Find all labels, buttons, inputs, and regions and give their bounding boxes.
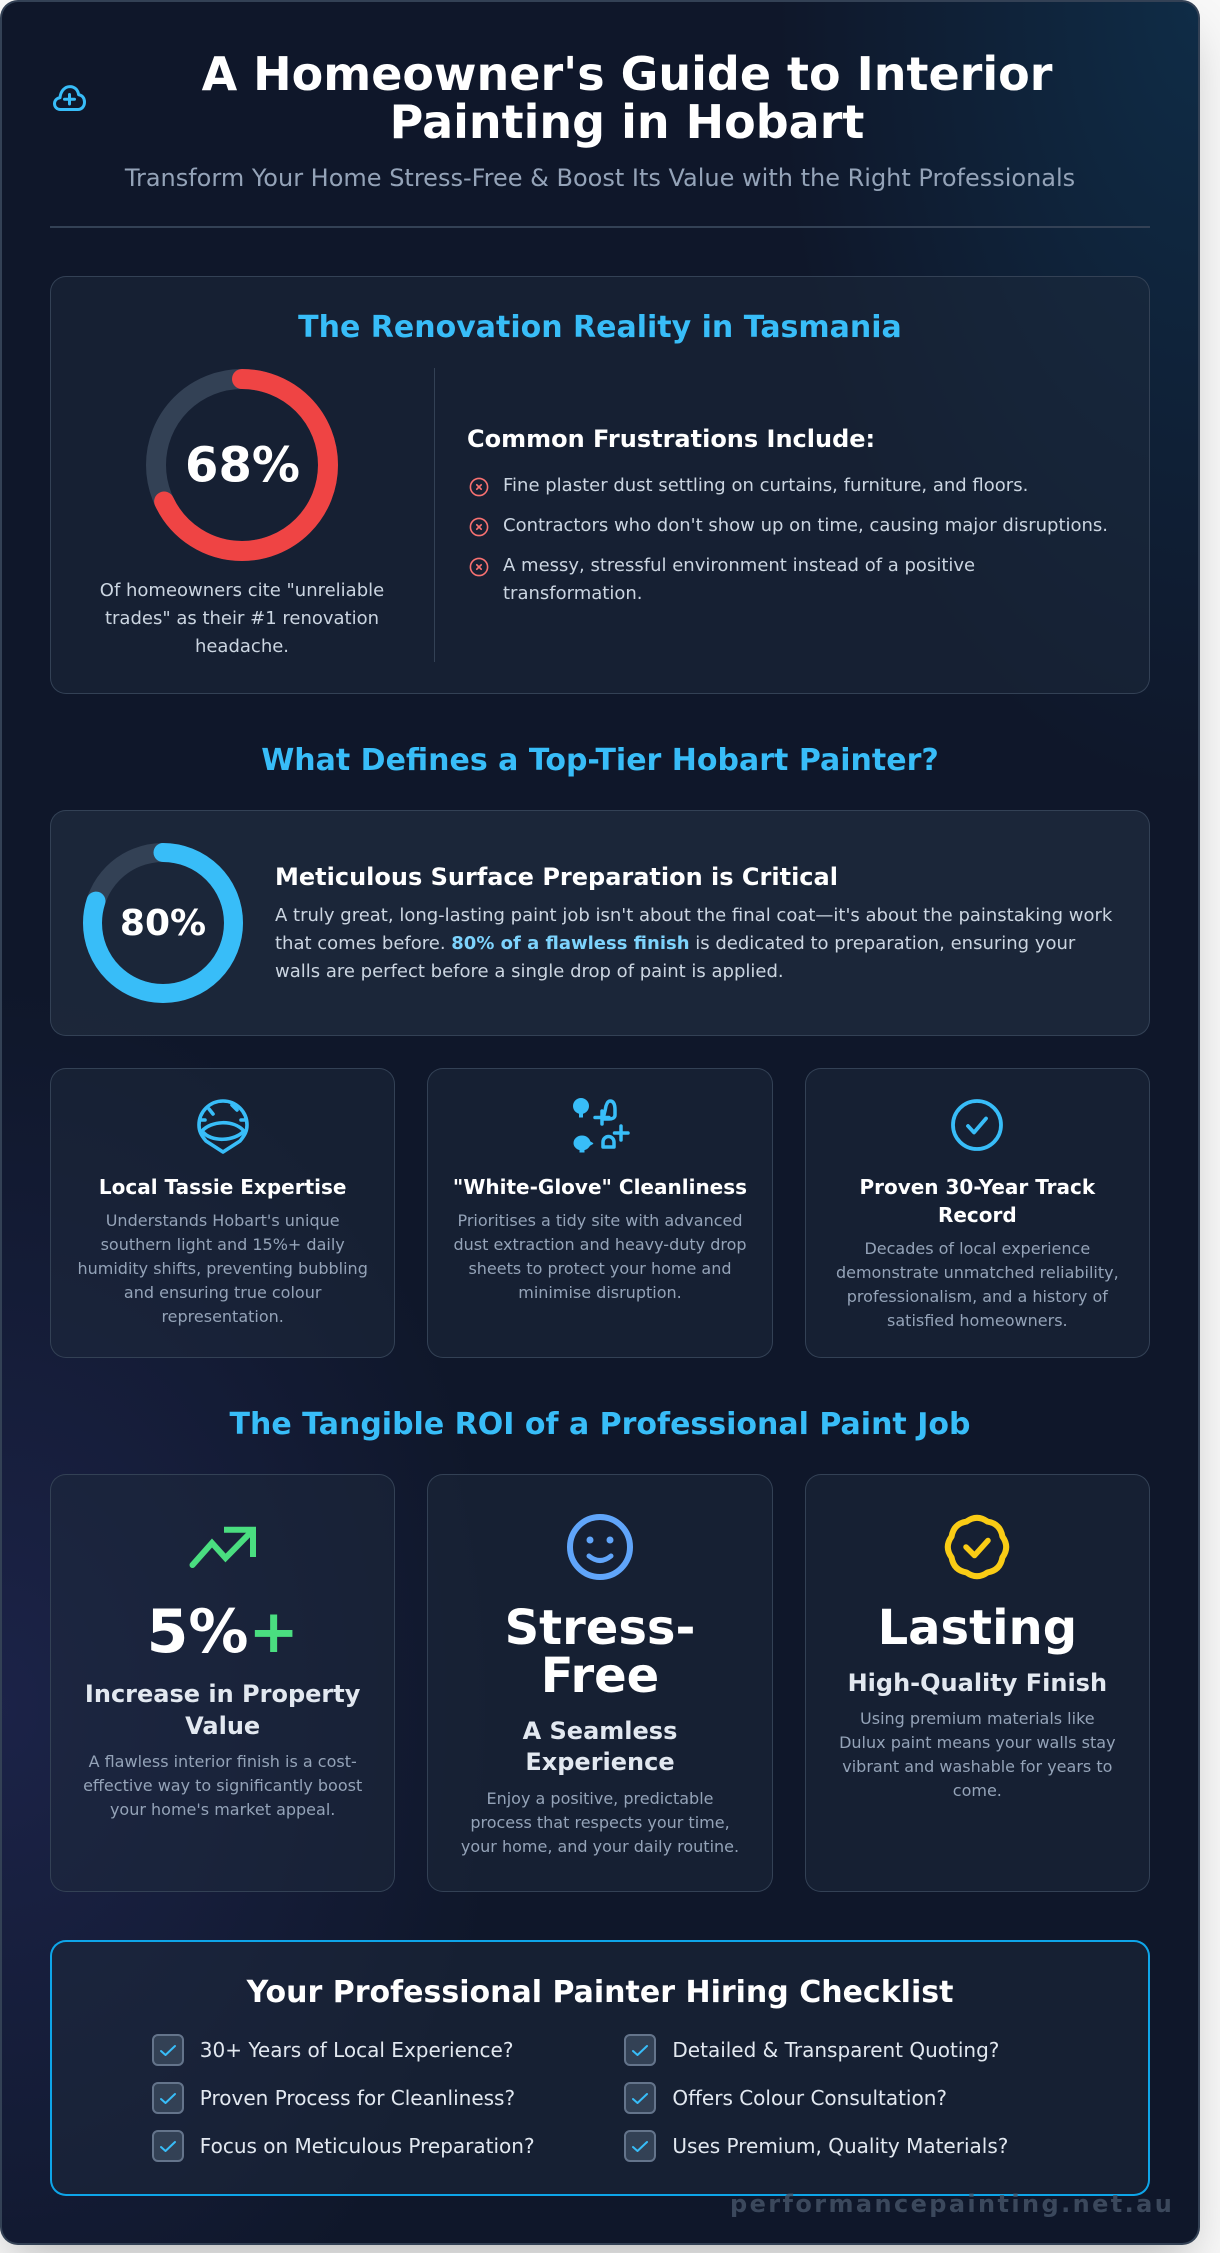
icon: x circle bbox=[470, 478, 488, 496]
checklist item 3 bbox=[152, 2130, 535, 2162]
card title bbox=[859, 1175, 1096, 1227]
card text: Decades of local experience bbox=[864, 1238, 1090, 1258]
stat text: effective way to significantly boost bbox=[83, 1776, 362, 1795]
checklist item 6: Uses Premium, Quality Materials? bbox=[672, 2134, 1008, 2158]
stat text: your home's market appeal. bbox=[110, 1800, 335, 1819]
donut caption: trades" as their #1 renovation bbox=[105, 608, 379, 629]
card text: southern light and 15%+ daily bbox=[101, 1234, 345, 1254]
heading: top-tier painter: What Defines a Top-Tier Hobart Painter? bbox=[261, 743, 939, 778]
card text: humidity shifts, preventing bubbling bbox=[77, 1258, 368, 1278]
checklist item 5: Offers Colour Consultation? bbox=[672, 2086, 947, 2110]
card text: minimise disruption. bbox=[518, 1282, 682, 1302]
stat label: High-Quality Finish bbox=[848, 1669, 1107, 1697]
frustration 2: Contractors who don't show up on time, causing major disruptions. bbox=[503, 515, 1108, 536]
stat: stress-free: Stress- bbox=[505, 1600, 695, 1656]
donut chart: 80% bbox=[83, 843, 243, 1003]
card title: Proven 30-Year Track bbox=[859, 1175, 1095, 1199]
card text: sheets to protect your home and bbox=[468, 1258, 732, 1278]
frustration 3: transformation. bbox=[503, 583, 642, 604]
icon: smile bbox=[567, 1514, 633, 1580]
stat label: Value bbox=[185, 1712, 260, 1740]
checklist item 5 bbox=[624, 2082, 947, 2114]
card: stress-free bbox=[427, 1474, 773, 1892]
heading: ROI: The Tangible ROI of a Professional Paint Job bbox=[230, 1407, 970, 1442]
icon: trending up bbox=[190, 1526, 256, 1568]
stat text: come. bbox=[953, 1780, 1002, 1800]
card text bbox=[77, 1210, 368, 1326]
stat label bbox=[522, 1717, 677, 1776]
stat label: A Seamless bbox=[523, 1717, 677, 1745]
checklist item 1: 30+ Years of Local Experience? bbox=[200, 2038, 513, 2062]
heading: preparation: Meticulous Surface Preparation is Critical bbox=[275, 863, 838, 891]
paragraph: preparation: walls are perfect before a single drop of paint is applied. bbox=[275, 961, 784, 982]
card text: professionalism, and a history of bbox=[847, 1286, 1108, 1306]
stat: lasting: Lasting bbox=[878, 1600, 1077, 1656]
frustration 1: Fine plaster dust settling on curtains, furniture, and floors. bbox=[503, 475, 1028, 496]
stat text: process that respects your time, bbox=[470, 1812, 730, 1832]
card title: "White-Glove" Cleanliness bbox=[453, 1175, 747, 1199]
donut caption: headache. bbox=[195, 636, 289, 657]
card title: Local Tassie Expertise bbox=[99, 1175, 346, 1199]
panel: hiring checklist bbox=[50, 1940, 1150, 2196]
stat text: your home, and your daily routine. bbox=[461, 1836, 739, 1856]
checklist item 4: Detailed & Transparent Quoting? bbox=[672, 2038, 999, 2062]
icon: map pin bbox=[197, 1099, 249, 1154]
card text: Prioritises a tidy site with advanced bbox=[457, 1210, 742, 1230]
title: Painting in Hobart bbox=[390, 95, 864, 149]
stat text: A flawless interior finish is a cost- bbox=[89, 1752, 357, 1771]
stat label: Experience bbox=[525, 1748, 675, 1776]
title: A Homeowner's Guide to Interior bbox=[202, 47, 1052, 101]
card text: satisfied homeowners. bbox=[887, 1310, 1068, 1330]
frustration 3: A messy, stressful environment instead of a positive bbox=[503, 555, 975, 576]
icon: x circle bbox=[470, 518, 488, 536]
card: white-glove cleanliness bbox=[427, 1068, 773, 1358]
paragraph: preparation bbox=[275, 905, 1112, 982]
checklist title: Your Professional Painter Hiring Checklist bbox=[247, 1975, 953, 2010]
card text: representation. bbox=[161, 1306, 284, 1326]
stat text bbox=[83, 1752, 362, 1819]
donut caption bbox=[100, 580, 384, 657]
card text bbox=[836, 1238, 1119, 1330]
stat: stress-free: Free bbox=[541, 1648, 659, 1704]
stat text: Using premium materials like bbox=[860, 1708, 1095, 1728]
icon: sparkles bbox=[573, 1098, 630, 1152]
donut chart: 80%: 80% bbox=[120, 903, 206, 944]
panel: surface preparation bbox=[50, 810, 1150, 1036]
heading: renovation reality: The Renovation Reality in Tasmania bbox=[298, 310, 902, 345]
stat text: Dulux paint means your walls stay bbox=[839, 1732, 1116, 1752]
header icon: cloud with plus bbox=[53, 85, 86, 111]
stat text: vibrant and washable for years to bbox=[842, 1756, 1112, 1776]
icon: check circle bbox=[951, 1099, 1003, 1151]
donut caption: Of homeowners cite "unreliable bbox=[100, 580, 384, 601]
checklist item 2: Proven Process for Cleanliness? bbox=[200, 2086, 515, 2110]
stat text: Enjoy a positive, predictable bbox=[486, 1788, 714, 1808]
card: lasting finish bbox=[805, 1474, 1150, 1892]
frustration 3 bbox=[503, 555, 975, 604]
checklist item 4 bbox=[624, 2034, 999, 2066]
card: property value bbox=[50, 1474, 395, 1892]
checklist item 3: Focus on Meticulous Preparation? bbox=[200, 2134, 535, 2158]
stat text bbox=[461, 1788, 739, 1856]
card title: Record bbox=[938, 1203, 1017, 1227]
stat: 5%+: 5%+ bbox=[147, 1597, 299, 1667]
panel: the renovation reality bbox=[50, 276, 1150, 694]
stat: stress-free bbox=[505, 1600, 695, 1704]
subtitle: Transform Your Home Stress-Free & Boost Its Value with the Right Professionals bbox=[125, 164, 1075, 192]
stat label: Increase in Property bbox=[85, 1680, 360, 1708]
checklist item 2 bbox=[152, 2082, 515, 2114]
paragraph: preparation: A truly great, long-lasting paint job isn't about the final coat—it's about the painstaking work bbox=[275, 905, 1112, 926]
stat text bbox=[839, 1708, 1116, 1800]
card text bbox=[453, 1210, 747, 1302]
card text: demonstrate unmatched reliability, bbox=[836, 1262, 1119, 1282]
card text: Understands Hobart's unique bbox=[106, 1210, 340, 1230]
checklist item 6 bbox=[624, 2130, 1008, 2162]
card: proven track record bbox=[805, 1068, 1150, 1358]
subheading: frustrations: Common Frustrations Include: bbox=[467, 425, 875, 453]
card text: dust extraction and heavy-duty drop bbox=[453, 1234, 747, 1254]
stat label bbox=[85, 1680, 360, 1740]
donut chart: 68%: 68% bbox=[185, 438, 300, 494]
paragraph: preparation: that comes before. 80% of a flawless finish is dedicated to preparation, ensuring your bbox=[275, 933, 1075, 954]
watermark: performancepainting.net.au bbox=[730, 2190, 1174, 2218]
checklist item 1 bbox=[152, 2034, 513, 2066]
icon: badge check bbox=[944, 1514, 1010, 1580]
donut chart: 68% bbox=[146, 369, 338, 561]
card text: and ensuring true colour bbox=[124, 1282, 321, 1302]
icon: x circle bbox=[470, 558, 488, 576]
card: local expertise bbox=[50, 1068, 395, 1358]
title bbox=[202, 47, 1052, 149]
